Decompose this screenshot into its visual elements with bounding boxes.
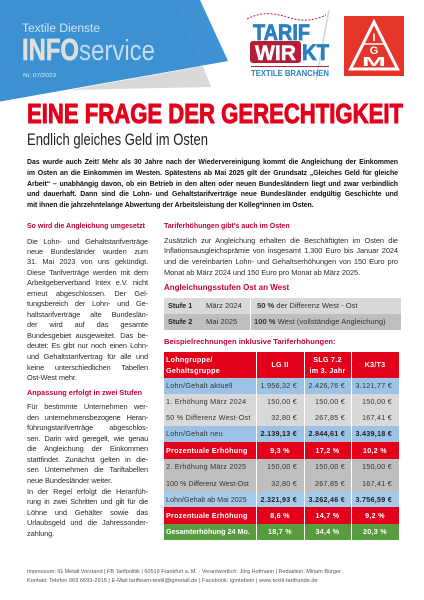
heading: So wird die Angleichung umgesetzt: So wird die Angleichung umgesetzt: [27, 223, 145, 230]
row: 1. Erhöhung: 150,00 €: [362, 397, 392, 406]
left column text 1: tungsbereich der Lohn- und Ge-: [27, 299, 148, 308]
left column text 2: sen. Darin wird geregelt, wie genau: [27, 434, 148, 443]
row: 50 % Differenz: [164, 410, 399, 426]
row: Prozentuale Erhöhung 2: Prozentuale Erhöhung: [166, 511, 248, 520]
left column text 2: rung in zwei Schritten und gilt für die: [27, 497, 148, 506]
row: Prozentuale Erhöhung 2: [164, 507, 399, 524]
row: Prozentuale Erhöhung 2: 9,2 %: [365, 511, 385, 520]
row: Lohn/Gehalt aktuell: Lohn/Gehalt aktuell: [166, 381, 233, 390]
right column text: Zusätzlich zur Angleichung erhalten die Beschäftigten im Osten die: [164, 236, 398, 245]
table header: [164, 352, 399, 378]
heading: Angleichungsstufen: Angleichungsstufen Ost an West: [164, 283, 289, 292]
intro text: und dauerhaft. Dann sind die Lohn- und Gehaltstarifverträge neue Bundesländer endgültig Geschichte und: [27, 191, 398, 198]
left column text 2: Für bestimmte Unternehmen wer-: [27, 402, 148, 411]
table header: im 3. Jahr: [309, 366, 346, 374]
left column text 2: Urlaubsgeld und die Jahressonder-: [27, 518, 148, 527]
row: Lohn/Gehalt ab Mai 2025: Lohn/Gehalt ab Mai 2025: [166, 495, 247, 504]
logo: Tarif wirkt: KT: [302, 40, 330, 65]
row: Lohn/Gehalt aktuell: 1.956,32 €: [261, 381, 297, 390]
left column text 2: stattfindet. Zunächst gelten in die-: [27, 455, 148, 464]
heading: Anpassung erfolgt in zwei Stufen: Anpassung erfolgt in zwei Stufen: [27, 388, 142, 397]
logo: IG Metall: [344, 16, 404, 76]
header banner: Nr. 07/2023: [23, 73, 56, 79]
logo: IG Metall: G: [370, 45, 378, 57]
row: Lohn/Gehalt ab Mai 2025: [164, 492, 399, 507]
row: Prozentuale Erhöhung 1: 17,2 %: [316, 446, 339, 455]
table header: LG II: [271, 360, 289, 369]
left column text 1: [27, 237, 148, 382]
row: 100 % Differenz: 32,80 €: [271, 478, 297, 488]
row: Lohn/Gehalt neu: 2.139,13 €: [261, 429, 297, 438]
row: Gesamterhöhung: 34,4 %: [316, 527, 339, 536]
left column text 1: erneut abgeschlossen. Der Gel-: [27, 289, 148, 298]
header banner: [0, 0, 228, 102]
left column text 1: und Gehaltstarifvertrag für alle und: [27, 352, 148, 361]
intro text: Arbeit“ – unabhängig davon, ob ein Betrieb in den alten oder neuen Bundesländern liegt und zwar verbindlich: [27, 181, 398, 188]
row: Lohn/Gehalt neu: 2.844,61 €: [309, 429, 345, 438]
table header: Lohngruppe/: [166, 355, 213, 364]
row: Lohn/Gehalt aktuell: [164, 378, 399, 394]
row: Lohn/Gehalt aktuell: 2.426,76 €: [309, 381, 345, 390]
left column text 2: zahlung.: [27, 529, 54, 538]
left column text 1: neue Bundesländer wurden zum: [27, 247, 148, 256]
right column text: Monat ab März 2024 und 150 Euro pro Monat ab März 2025.: [164, 268, 360, 277]
left column text 1: deutet: Es gibt nur noch einen Lohn-: [27, 341, 148, 350]
table header: SLG 7.2: [313, 355, 342, 364]
row: 50 % Differenz: 50 % Differenz West-Ost: [166, 413, 251, 422]
left column text 2: den unternehmensbezogene Heran-: [27, 413, 148, 422]
left column text 2: Löhne und Gehälter sowie das: [27, 508, 148, 517]
right column text: und die vereinbarten Lohn- und Gehaltserhöhungen von 150 Euro pro: [164, 257, 398, 266]
row: 100 % Differenz: [164, 476, 399, 492]
row: Gesamterhöhung: [164, 524, 399, 540]
right column text: Inflationsausgleichsprämie von insgesamt 1.300 Euro bis Januar 2024: [164, 246, 398, 255]
row: 100 % Differenz: 267,85 €: [315, 478, 345, 488]
footer imprint: [27, 569, 341, 584]
row: 2. Erhöhung: 150,00 €: [362, 462, 392, 471]
left column text 1: Diese Tarifverträge werden mit dem: [27, 268, 148, 277]
table: Stufen: [164, 298, 401, 330]
row: Gesamterhöhung: 20,3 %: [363, 527, 387, 536]
row: 2. Erhöhung: 2. Erhöhung März 2025: [166, 462, 246, 471]
right column text: [164, 236, 398, 277]
left column text 2: die Angleichung der Einkommen: [27, 444, 148, 453]
left column text 1: Ost-West mehr.: [27, 373, 77, 382]
footer imprint: Kontakt: Telefon 069 6693-2915 | E-Mail tarifteam-textil@igmetall.de | Facebook: igmtebein | www.textil-tarifrunde.de: [27, 578, 318, 584]
row: Stufe 2: Mai 2025: [206, 317, 237, 326]
row: 100 % Differenz: 167,41 €: [362, 478, 392, 488]
row: Lohn/Gehalt ab Mai 2025: 3.262,46 €: [309, 495, 345, 504]
row: 50 % Differenz: 267,85 €: [315, 413, 345, 422]
row: Stufe 1: 50 % der Differenz West - Ost: [257, 301, 358, 310]
row: Prozentuale Erhöhung 1: [164, 442, 399, 459]
left column text 2: neue Bundesländer weiter.: [27, 476, 112, 485]
left column text 2: In der Regel erfolgt die Heranfüh-: [27, 487, 148, 496]
row: Prozentuale Erhöhung 1: 10,2 %: [363, 446, 387, 455]
left column text 1: der wird auf das gesamte: [27, 320, 148, 329]
row: 1. Erhöhung: 150,00 €: [267, 397, 297, 406]
logo: Tarif wirkt: TEXTILE BRANCHEN: [251, 69, 329, 78]
row: 1. Erhöhung: 1. Erhöhung März 2024: [166, 397, 246, 406]
table header: K3/T3: [365, 360, 385, 369]
row: Lohn/Gehalt neu: [164, 426, 399, 442]
row: 1. Erhöhung: 150,00 €: [315, 397, 345, 406]
row: Lohn/Gehalt aktuell: 3.121,77 €: [356, 381, 392, 390]
intro text: im Osten an die Einkommen im Westen. Spätestens ab Mai 2025 gilt der Grundsatz „Gleiches Geld für gleiche: [27, 170, 398, 177]
row: Stufe 1: [164, 298, 401, 314]
table header: Gehaltsgruppe: [166, 366, 220, 374]
left column text 2: führungstarifverträge abgeschlos-: [27, 423, 148, 432]
row: Gesamterhöhung: Gesamterhöhung 24 Mo.: [166, 527, 250, 536]
row: 2. Erhöhung: 150,00 €: [315, 462, 345, 471]
logo: Tarif wirkt: [246, 10, 330, 80]
footer imprint: Impressum: IG Metall Vorstand | FB Tarifpolitik | 60519 Frankfurt a. M. · Verantwortlich: Jörg Hofmann | Redaktion: Miriam Bürger: [27, 569, 341, 575]
row: 50 % Differenz: 167,41 €: [362, 413, 392, 422]
header banner: INFO: [22, 32, 79, 67]
heading: Beispielrechnungen: Beispielrechnungen inklusive Tariferhöhungen:: [164, 337, 336, 346]
left column text 1: Die Lohn- und Gehaltstarifverträge: [27, 237, 148, 246]
left column text 1: Bundesgebiet ausgeweitet. Das be-: [27, 331, 148, 340]
row: Stufe 1: März 2024: [206, 301, 242, 310]
left column text 1: haltstarifverträge alte Bundeslän-: [27, 310, 148, 319]
row: Prozentuale Erhöhung 1: 9,3 %: [270, 446, 290, 455]
left column text 1: 31. Mai 2023 von uns gekündigt.: [27, 257, 148, 266]
row: Prozentuale Erhöhung 1: Prozentuale Erhöhung: [166, 446, 248, 455]
row: Lohn/Gehalt neu: 3.439,18 €: [356, 429, 392, 438]
intro text: Das wurde auch Zeit! Mehr als 30 Jahre nach der Wiedervereinigung kommt die Angleichung der Einkommen: [27, 159, 398, 166]
row: 2. Erhöhung: [164, 459, 399, 476]
table: Beispielrechnungen: [164, 352, 399, 540]
intro text: mit ihnen die jahrzehntelange Abwertung der Arbeitsleistung der Kolleg*innen im Osten.: [27, 202, 314, 209]
left column text 2: [27, 402, 148, 538]
logo: Tarif wirkt: WIR: [255, 42, 296, 65]
row: Lohn/Gehalt neu: Lohn/Gehalt neu: [166, 429, 223, 438]
header banner: Textile Dienste: [22, 23, 100, 35]
logo: IG Metall: M: [362, 54, 386, 69]
row: Lohn/Gehalt ab Mai 2025: 2.321,93 €: [261, 495, 297, 504]
row: 50 % Differenz: 32,80 €: [271, 413, 297, 422]
row: Gesamterhöhung: 18,7 %: [268, 527, 292, 536]
row: Stufe 1: Stufe 1: [168, 301, 192, 310]
header banner: service: [79, 35, 155, 67]
row: Prozentuale Erhöhung 2: 14,7 %: [316, 511, 339, 520]
heading: Tariferhöhungen: Tariferhöhungen gibt's auch im Osten: [164, 223, 290, 230]
row: Prozentuale Erhöhung 2: 8,6 %: [270, 511, 290, 520]
left column text 1: Arbeitgeberverband Intex e.V. nicht: [27, 278, 148, 287]
row: 2. Erhöhung: 150,00 €: [267, 462, 297, 471]
row: Lohn/Gehalt ab Mai 2025: 3.756,59 €: [356, 495, 392, 504]
row: Stufe 2: [164, 314, 401, 330]
logo: IG Metall: I: [372, 32, 376, 44]
row: 100 % Differenz: 100 % Differenz West-Ost: [166, 478, 249, 488]
row: 1. Erhöhung: [164, 394, 399, 410]
row: Stufe 2: Stufe 2: [168, 317, 192, 326]
left column text 2: sen Unternehmen die Tariftabellen: [27, 465, 148, 474]
intro text: [27, 158, 398, 209]
logo: Tarif wirkt: TARIF: [253, 20, 310, 45]
left column text 1: keine unterschiedlichen Tabellen: [27, 363, 148, 372]
row: Stufe 2: 100 % West (vollständige Angleichung): [254, 317, 386, 326]
